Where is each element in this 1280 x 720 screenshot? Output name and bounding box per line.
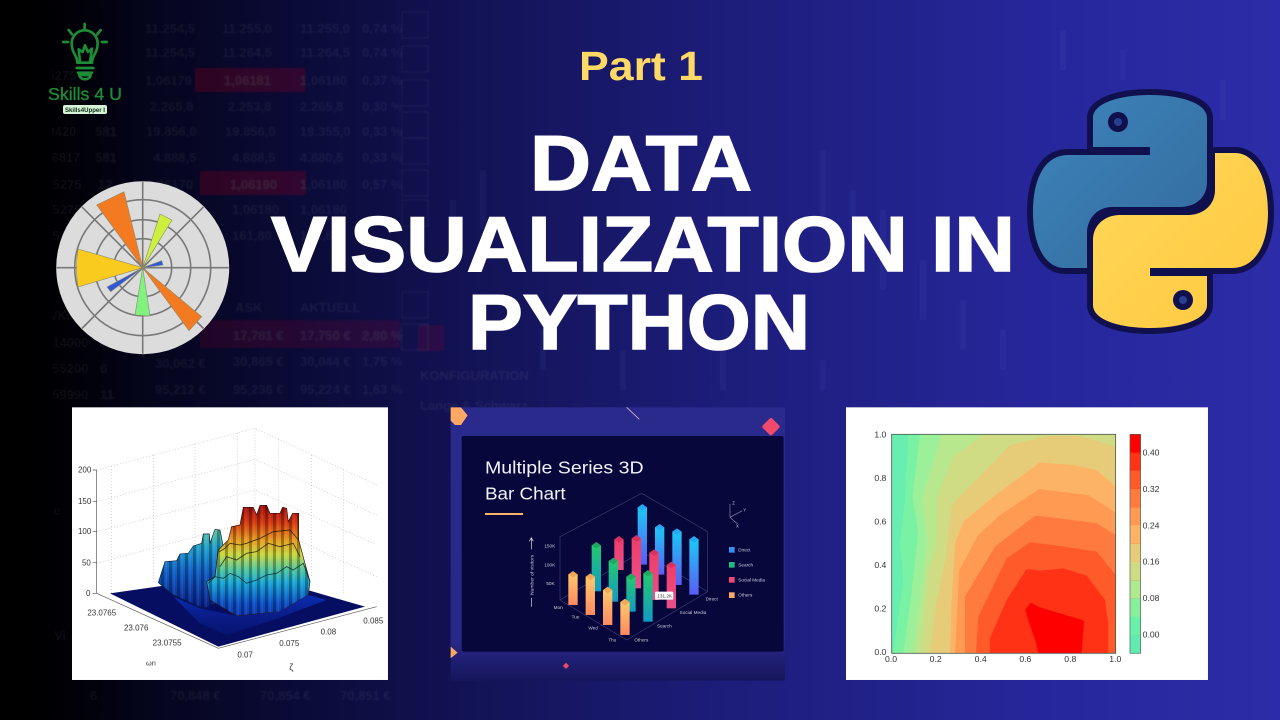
decorative shapes [451,407,780,669]
faint trading screen backdrop: 2.253,8 [228,99,271,114]
faint trading screen backdrop: 30,044 € [300,354,351,369]
chart: 3D histogram panel [72,407,388,680]
faint trading screen backdrop: 30,865 € [233,354,284,369]
floor surface [110,573,365,647]
faint trading screen backdrop: 95,224 € [300,382,351,397]
title: Data Visualization in Python: VISUALIZATION IN [271,200,1015,288]
y axis arrow [529,538,533,607]
faint trading screen backdrop: 2,80 % [362,328,403,343]
faint trading screen backdrop: 606817 [37,150,80,165]
faint trading screen backdrop: 4.888,5 [232,150,275,165]
faint trading screen backdrop: 95,212 € [155,382,206,397]
axis labels: 0.085 [363,616,384,625]
axis labels: ωn [146,659,156,668]
axis gizmo: Y [743,507,746,512]
faint trading screen backdrop: 17,750 € [300,328,351,343]
bars: social media [614,535,676,608]
faint trading screen backdrop: 11.254,5 [145,45,195,60]
faint trading screen backdrop: 0,57 % [362,177,403,192]
faint trading screen backdrop: 581 [95,124,117,139]
faint trading screen backdrop: 17,781 € [233,328,284,343]
tooltip [655,592,673,600]
icon: light bulb [63,24,107,79]
tick labels: 1.0 [874,429,887,439]
axis labels: Direct [706,597,719,602]
faint trading screen backdrop: 11.254,5 [145,21,195,36]
faint trading screen backdrop: DTE [20,474,46,489]
faint trading screen backdrop: 70,848 € [170,688,221,703]
faint trading screen backdrop: ersiche [15,503,61,518]
heading: Part 1: Part 1 [579,43,703,89]
axis labels: 23.0755 [153,638,182,647]
faint trading screen backdrop: 11 [100,387,114,402]
faint trading screen backdrop: 0,74 % [362,21,403,36]
axis labels: 0.08 [321,628,337,637]
axis labels: 200 [78,466,92,475]
colour bar: 0.16 [1143,557,1160,567]
tick labels: 0.0 [874,647,887,657]
chart: multiple series 3D bar chart panel [451,407,785,681]
faint trading screen backdrop: 769 [20,418,42,433]
faint trading screen backdrop: ATTILTUM [0,271,53,283]
faint trading screen backdrop: RWE [20,563,50,578]
faint trading screen backdrop: 514000 [45,335,88,350]
axis gizmo: X [736,523,739,528]
faint trading screen backdrop: WKN [45,308,76,323]
tick labels: 1.0 [1109,654,1122,664]
bars: tall right hump [207,505,310,616]
axis labels: 100 [78,527,92,536]
chart: contour plot panel [846,407,1208,680]
faint trading screen backdrop: 6 [100,361,107,376]
faint trading screen backdrop: 11.255,0 [222,21,272,36]
faint trading screen backdrop: 2.265,8 [150,99,193,114]
tooltip: 131.2K [657,593,673,598]
tick labels [874,429,1122,664]
faint trading screen backdrop: A1H [20,446,46,461]
logo wordmark: Skills 4 U [48,84,122,104]
axis labels: Tue [572,615,580,620]
faint trading screen backdrop: 30,062 € [155,356,206,371]
colour bar: 0.32 [1143,484,1160,494]
axis gizmo: Z [732,501,735,506]
tick labels: 0.4 [874,560,887,570]
faint trading screen backdrop: 659990 [45,387,88,402]
chart: polar rose (matplotlib logo) [56,181,229,354]
faint trading screen backdrop: 629700 [0,688,43,703]
axis labels: 0 [86,589,91,598]
axis labels: Thu [608,637,617,642]
faint trading screen backdrop: 70,854 € [260,688,311,703]
axis labels: Mon [554,605,563,610]
faint trading screen backdrop: AKTUELL [300,300,361,315]
faint trading screen backdrop: 0,33 % [362,124,403,139]
colour bar: 0.40 [1143,447,1160,457]
axis labels: 23.0765 [87,609,117,618]
wireframe [560,493,708,640]
faint trading screen backdrop: 19.856,0 [146,124,197,139]
legend: Search [738,562,753,567]
faint trading screen backdrop: 70,851 € [340,688,391,703]
faint trading screen backdrop: 969420 [33,124,76,139]
axes [93,470,377,648]
faint trading screen backdrop: 0,30 % [362,99,403,114]
faint trading screen backdrop: MUV [20,533,49,548]
faint trading screen backdrop: 19.355,0 [300,124,351,139]
faint trading screen backdrop: 19.856,0 [225,124,276,139]
axis labels: 150 [78,497,92,506]
axis labels: 0.07 [237,650,253,659]
faint trading screen backdrop: KONFIGURATION [420,368,529,383]
legend [729,547,765,598]
axis gizmo [730,501,746,528]
faint trading screen backdrop: 0,37 % [362,73,403,88]
faint trading screen backdrop: 555200 [45,361,88,376]
title: Data Visualization in Python: PYTHON [468,278,810,366]
faint trading screen backdrop: SAP [20,593,47,608]
front low blue bars [173,595,327,635]
logo: Skills 4 U [48,24,122,114]
axis labels: 0.075 [279,639,300,648]
faint trading screen backdrop: 0,74 % [362,45,403,60]
filled contours [892,434,1116,653]
axis labels [529,543,719,642]
faint trading screen backdrop: 161,80 [232,228,272,243]
faint trading screen backdrop: 4.880,5 [300,150,343,165]
axis labels [78,466,384,672]
faint trading screen backdrop: 2.265,8 [300,99,343,114]
faint trading screen backdrop: 1,06180 [300,202,347,217]
legend: Others [738,593,753,598]
faint trading screen backdrop: 12 [98,177,112,192]
bars: direct [638,504,699,595]
tick labels: 0.0 [885,654,897,664]
colour bar: 0.08 [1143,593,1160,603]
tick labels: 0.8 [874,473,887,483]
faint trading screen backdrop: SIE [20,658,41,673]
faint trading screen backdrop: 11.255,0 [300,21,350,36]
faint trading screen backdrop: 4.888,5 [153,150,196,165]
faint trading screen backdrop: 0,33 % [362,150,403,165]
icon: Python logo [1033,95,1268,328]
title underline [485,513,523,515]
chart title: Multiple Series 3D [485,457,644,477]
tick labels: 0.8 [1064,654,1077,664]
tick labels: 0.6 [1019,654,1032,664]
axis labels: Others [634,637,649,642]
faint trading screen backdrop: 6 [90,688,97,703]
legend: Direct [738,547,751,552]
faint trading screen backdrop: 1,06170 [146,177,193,192]
axis labels: 100K [544,562,556,567]
colour bar [1130,434,1160,653]
axis labels: Wed [588,626,598,631]
faint trading screen backdrop: 11.264,5 [300,45,350,60]
title: Data Visualization in Python [271,119,1015,366]
axis labels: Number of visitors [529,554,535,595]
tick labels: 0.4 [975,654,987,664]
faint trading screen backdrop: 965275 [38,228,81,243]
bars: left hump [158,529,223,608]
axis labels: 50 [82,558,91,567]
faint trading screen backdrop: 11.264,5 [222,45,272,60]
bars: others [568,571,630,635]
faint trading screen backdrop: KGaA Vi [15,628,66,643]
faint trading screen backdrop: 965275 [33,68,76,83]
faint trading screen backdrop: 581 [95,150,117,165]
faint trading screen backdrop: 1,06179 [145,73,192,88]
title: Data Visualization in Python: DATA [530,119,752,207]
axis labels: ζ [289,662,293,672]
faint trading screen backdrop: 1,63 % [362,382,403,397]
axis labels: 23.076 [124,624,149,633]
faint trading screen backdrop: 965275 [38,202,81,217]
legend: Social Media [738,578,765,583]
faint trading screen backdrop: 161,80 [300,228,340,243]
plot frame [892,434,1116,653]
faint trading screen backdrop: ASK [235,300,263,315]
colour bar: 0.24 [1143,520,1160,530]
faint trading screen backdrop: 95,236 € [233,382,284,397]
axis labels: 150K [544,543,556,548]
faint trading screen backdrop: 965275 [38,177,81,192]
faint trading screen backdrop: 6 [100,335,107,350]
axis labels: 50K [546,581,556,586]
chart title [485,457,644,503]
bars: search [592,542,653,622]
colour bar: 0.00 [1143,629,1160,639]
axis labels: Search [657,624,672,629]
faint trading screen backdrop: 1,06181 [224,73,271,88]
faint trading screen backdrop: 1,06190 [230,177,277,192]
faint trading screen backdrop: 1,75 % [362,354,403,369]
tick labels: 0.2 [930,654,942,664]
logo tagline badge: Skills4Upper I [65,107,105,114]
tick labels: 0.2 [874,604,887,614]
faint trading screen backdrop: Lange & Schwarz [420,398,528,413]
faint trading screen backdrop: 1,06180 [300,177,347,192]
axis labels: Social Media [680,610,707,615]
chart title: Bar Chart [485,483,566,503]
tick labels: 0.6 [874,516,887,526]
faint trading screen backdrop: 1,06180 [232,202,279,217]
faint trading screen backdrop: 1,06180 [300,73,347,88]
